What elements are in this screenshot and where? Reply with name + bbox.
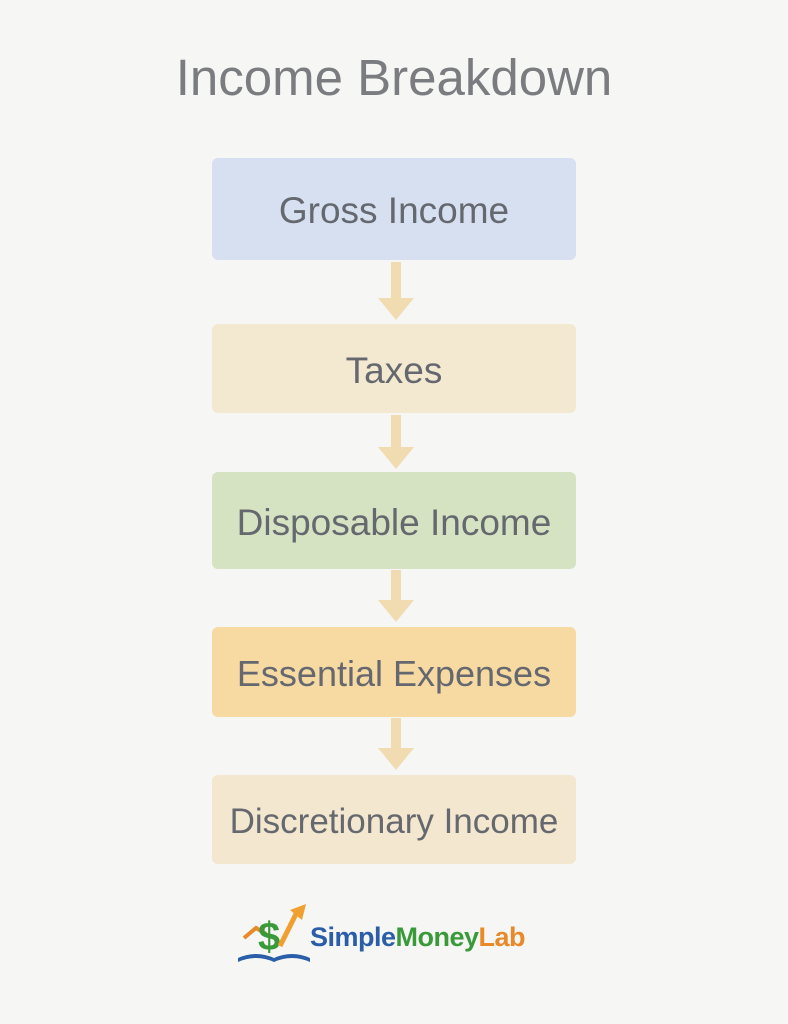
box: essential expenses [212,627,576,717]
box: essential expenses: Essential Expenses [237,653,551,694]
title: Income Breakdown [176,49,612,106]
logo [238,904,525,962]
box: disposable income [212,472,576,569]
arrow 1 [378,262,414,320]
box: taxes: Taxes [346,350,442,390]
box: disposable income: Disposable Income [237,502,551,542]
arrow 4 [378,718,414,770]
brand text: SimpleMoneyLab [310,922,525,952]
icon: dollar book [238,904,310,962]
box: gross income [212,158,576,260]
icon: dollar book: $ [258,915,280,959]
arrow 2 [378,415,414,469]
box: discretionary income [212,775,576,864]
box: discretionary income: Discretionary Income [230,802,558,840]
box: taxes [212,324,576,413]
arrow 3 [378,570,414,622]
box: gross income: Gross Income [279,190,509,231]
